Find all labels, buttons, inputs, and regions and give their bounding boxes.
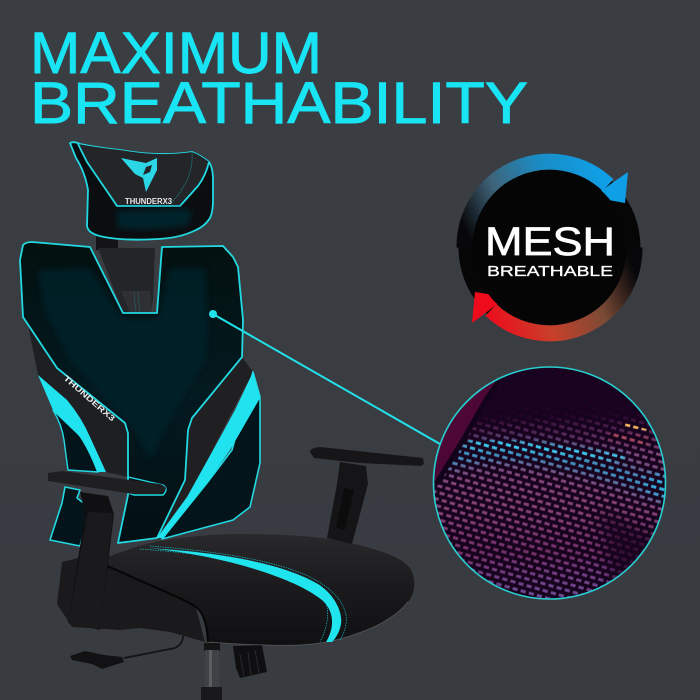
right side bar xyxy=(157,357,253,538)
headrest logo xyxy=(121,158,157,192)
headrest xyxy=(70,142,213,250)
left side bar xyxy=(28,325,128,477)
seat cyan stripe xyxy=(148,548,341,642)
badge: mesh breathable xyxy=(458,156,640,338)
tilt lever xyxy=(70,636,183,669)
badge heading: MESH xyxy=(485,220,615,264)
left cyan strip xyxy=(38,375,106,472)
right wing panel xyxy=(162,372,260,539)
headrest brand text: THUNDERX3 xyxy=(125,197,173,206)
right armrest xyxy=(310,447,424,544)
backrest brand text: THUNDERX3 xyxy=(62,374,117,424)
blue arrow xyxy=(464,162,628,248)
left wing panel xyxy=(53,410,98,472)
lower left flap xyxy=(50,487,90,546)
backrest xyxy=(20,242,260,546)
mesh panel xyxy=(38,268,208,460)
seat mechanism xyxy=(57,557,205,642)
lens ring xyxy=(434,367,666,599)
spine xyxy=(98,248,155,313)
mesh close-up lens xyxy=(432,366,666,600)
title xyxy=(30,21,528,136)
right cyan strip xyxy=(157,372,260,538)
title: MAXIMUM xyxy=(30,21,322,86)
magenta fabric wedge xyxy=(434,382,496,486)
badge disc xyxy=(458,156,640,338)
height knob xyxy=(233,645,267,678)
red arrow xyxy=(472,248,635,333)
gas lift and base xyxy=(201,643,222,700)
seat cushion xyxy=(107,534,414,645)
inner disc xyxy=(472,170,626,324)
backrest outline xyxy=(20,242,243,543)
office chair xyxy=(20,142,424,700)
badge subheading: BREATHABLE xyxy=(487,264,613,280)
backrest body xyxy=(20,242,243,543)
title: BREATHABILITY xyxy=(30,71,528,136)
left armrest xyxy=(48,471,166,630)
callout leader line xyxy=(209,310,440,444)
